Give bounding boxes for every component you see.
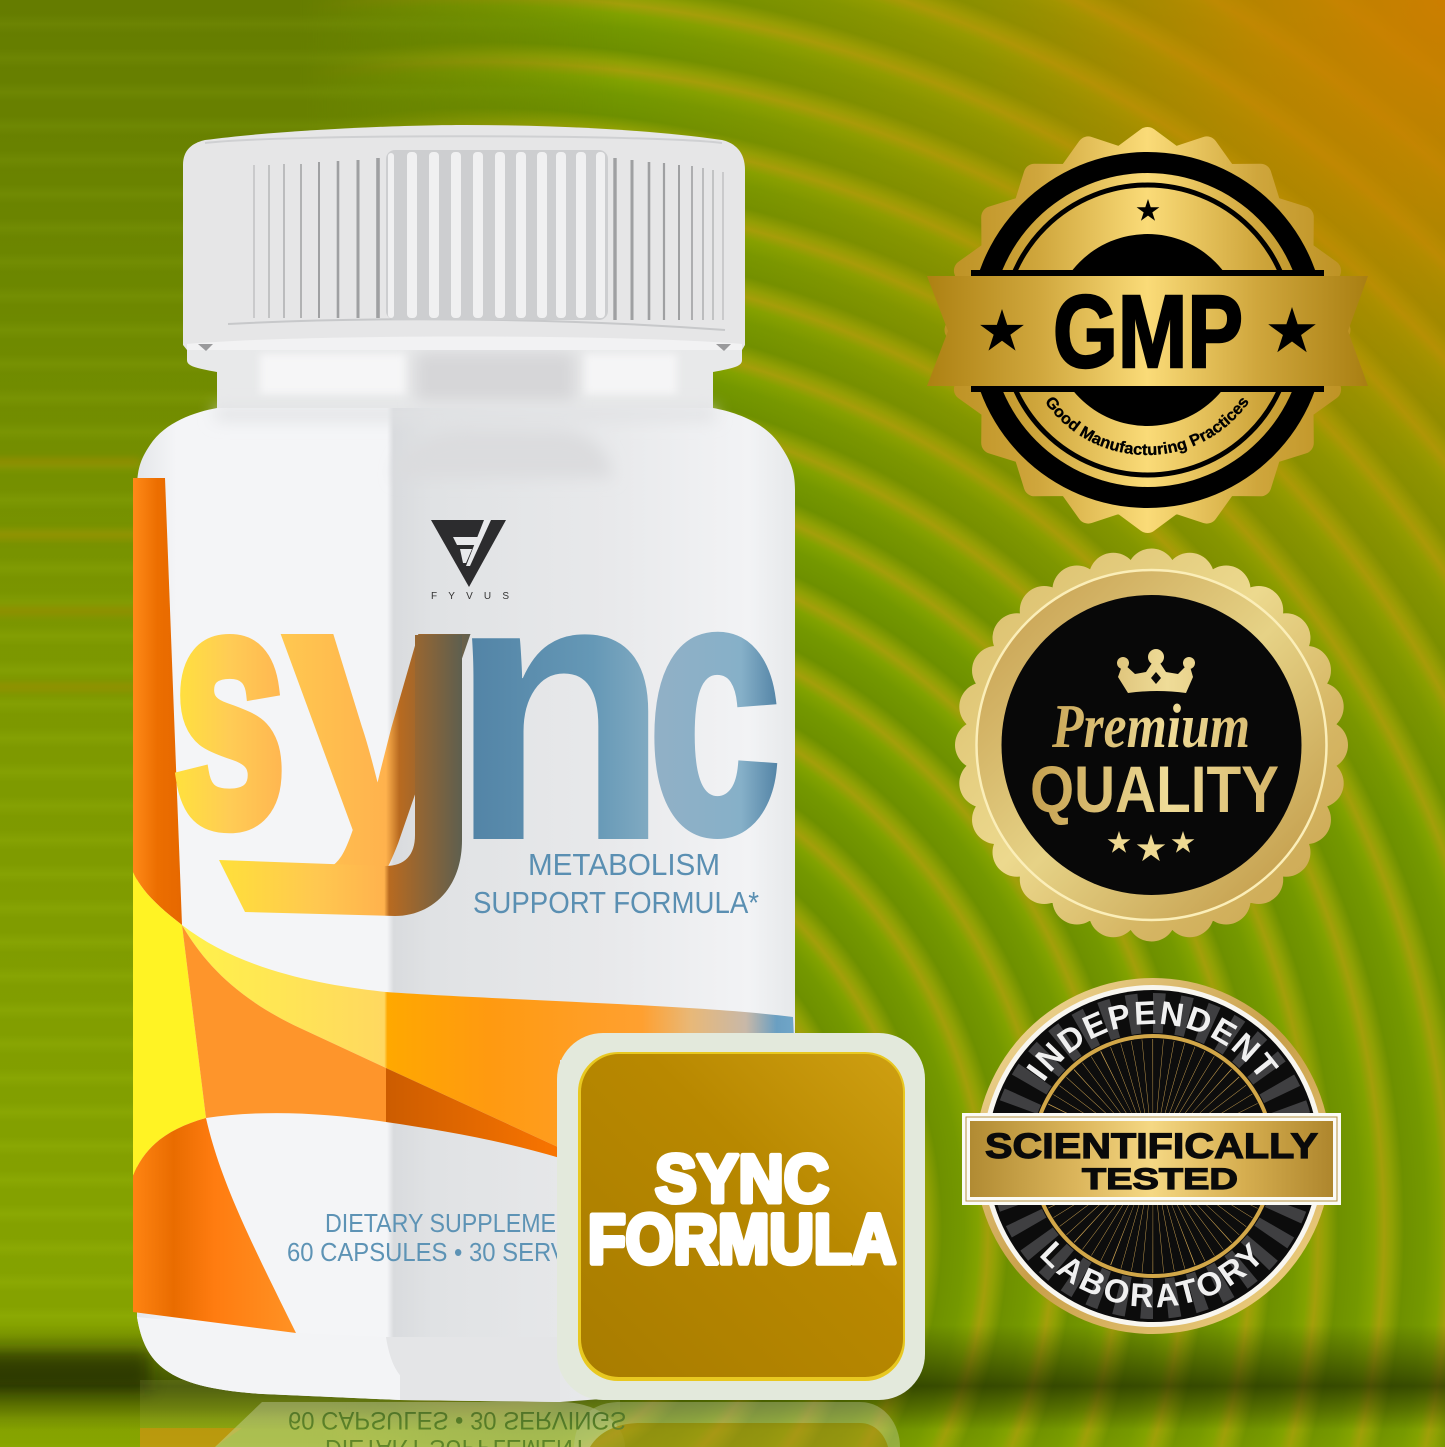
GMP text: GMP [1053,274,1243,389]
bottle base lower strip [386,1337,560,1402]
badge: scientifically tested [962,978,1341,1334]
stars [980,199,1316,352]
premium script: Premium [1051,693,1250,761]
crown [1117,649,1195,693]
letter y: y [280,495,473,913]
dietary text: DIETARY SUPPLEMENT [325,1208,587,1238]
cap [183,125,745,351]
cap grip ribs centre [386,150,608,320]
sync wordmark [173,495,781,920]
product descriptor: SUPPORT FORMULA* [473,885,759,920]
y stem and tail swoosh [219,635,462,916]
laboratory arc: LABORATORY [1040,1240,1260,1308]
product bottle [133,125,900,1447]
banner text [985,1127,1318,1196]
background: horizontal stripes on the left [0,0,579,1447]
dark floor shadow left of the bottle [0,1350,150,1390]
brand logo FYVUS: FYVUS [431,591,509,602]
independent arc: INDEPENDENT [1026,1001,1279,1081]
scalloped edge [956,138,1340,522]
bottle reflection: 60 CAPSULES • 30 SERVINGS [288,1406,626,1434]
bottle reflection [140,1380,900,1447]
letter s: s [173,519,286,896]
dietary text [287,1208,625,1267]
shoulder shading [215,408,715,478]
badge: GMP [927,127,1368,533]
dietary text: 60 CAPSULES • 30 SERVINGS [287,1237,625,1267]
card title [588,1141,896,1278]
badge: premium quality [966,559,1338,931]
product descriptor: METABOLISM [528,847,720,882]
quality: QUALITY [1030,752,1279,826]
brand logo FYVUS [431,520,509,602]
orange streaks on the left background [0,458,140,691]
product descriptor [473,847,759,920]
bottle neck [187,345,742,420]
arc caption: Good Manufacturing Practices [1046,397,1248,456]
card title: FORMULA [588,1200,896,1278]
banner text: SCIENTIFICALLY [985,1127,1318,1166]
bottle base shading [137,1317,400,1400]
label artwork [133,478,795,1333]
cap grip lines right [615,158,723,320]
formula card [557,1033,925,1400]
bottle body [137,408,795,1402]
card title: SYNC [655,1141,829,1217]
letter c: c [648,503,781,908]
ribbon [927,276,1368,386]
three stars [1108,831,1194,861]
banner text: TESTED [1082,1163,1238,1196]
cap grip lines left [254,158,378,318]
banner [962,1113,1341,1205]
letter n: n [448,495,671,920]
